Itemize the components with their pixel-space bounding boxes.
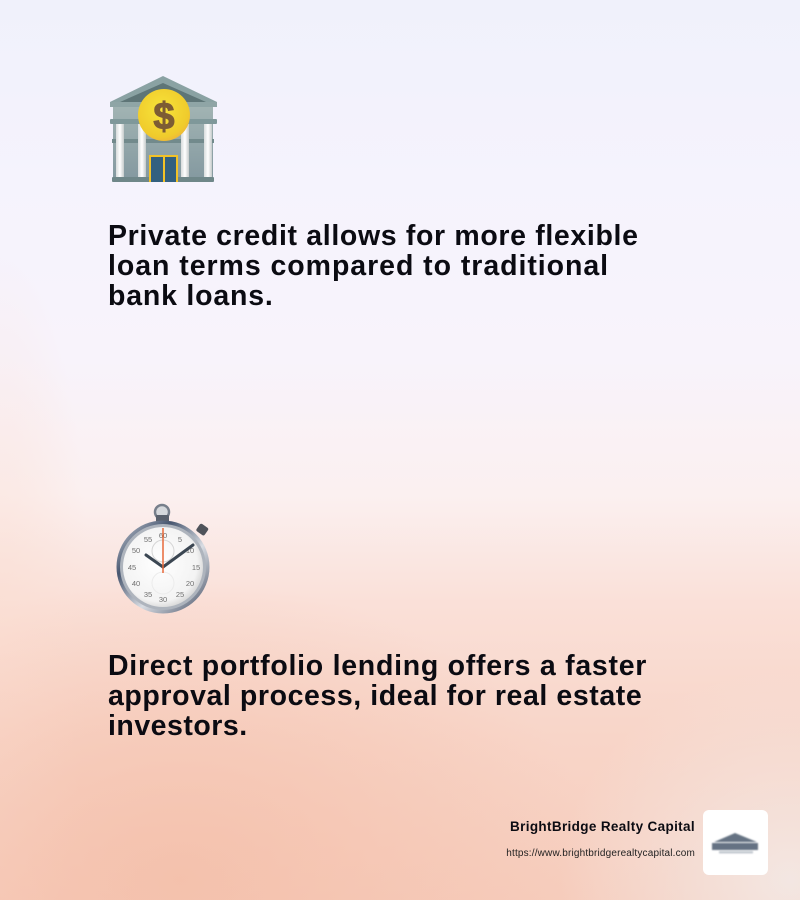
icon: bank with dollar coin: $	[153, 96, 175, 138]
text block: direct portfolio lending: approval process, ideal for real estate	[108, 680, 642, 712]
brand name: BrightBridge Realty Capital	[510, 819, 695, 834]
icon: stopwatch: 40	[132, 579, 140, 588]
icon: stopwatch: 50	[132, 546, 140, 555]
icon: stopwatch: 20	[186, 579, 194, 588]
icon: stopwatch: 30	[159, 595, 167, 604]
logo tile	[703, 810, 768, 875]
text block: direct portfolio lending: Direct portfolio lending offers a faster	[108, 650, 647, 682]
icon: stopwatch: 5	[178, 535, 182, 544]
text block: private credit: bank loans.	[108, 280, 274, 312]
text block: direct portfolio lending	[108, 650, 647, 742]
text block: private credit	[108, 220, 639, 312]
text block: direct portfolio lending: investors.	[108, 710, 248, 742]
text block: private credit: Private credit allows for more flexible	[108, 220, 639, 252]
icon: stopwatch	[116, 504, 210, 614]
icon: stopwatch: 60	[159, 531, 167, 540]
footer brand block	[506, 810, 768, 875]
text block: private credit: loan terms compared to traditional	[108, 250, 609, 282]
icon: stopwatch: 35	[144, 590, 152, 599]
icon: stopwatch: 10	[186, 546, 194, 555]
icon: stopwatch: 25	[176, 590, 184, 599]
icon: stopwatch: 55	[144, 535, 152, 544]
icon: stopwatch: 15	[192, 563, 200, 572]
icon: stopwatch: 45	[128, 563, 136, 572]
icon: bank with dollar coin	[110, 76, 217, 182]
website url: https://www.brightbridgerealtycapital.com	[506, 848, 695, 859]
